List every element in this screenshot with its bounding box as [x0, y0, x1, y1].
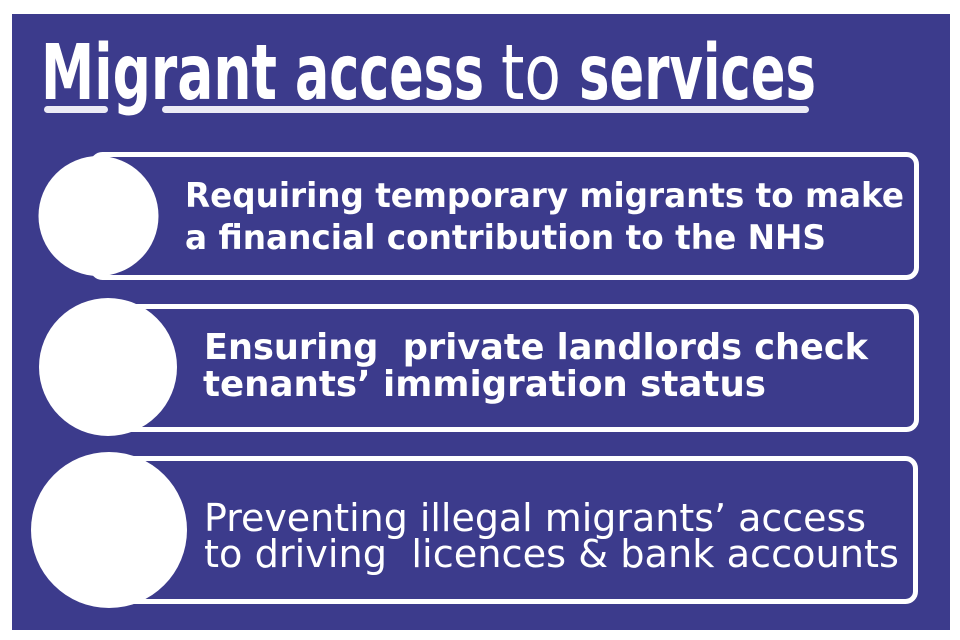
box outline [112, 458, 916, 602]
title: services [579, 29, 816, 118]
text block: Requiring temporary migrants to make [185, 176, 904, 216]
icon placeholder circle [39, 298, 177, 436]
text block [204, 496, 899, 576]
title [41, 29, 816, 118]
text block: a financial contribution to the NHS [185, 218, 826, 258]
panel: landlord checks [39, 298, 916, 436]
title: Migrant [41, 29, 277, 118]
text block: Ensuring private landlords check [204, 327, 869, 368]
text block [203, 327, 869, 405]
title: access [295, 29, 484, 118]
title underline [44, 106, 809, 113]
icon placeholder circle [38, 156, 158, 276]
title: to [501, 29, 561, 118]
icon placeholder circle [31, 452, 187, 608]
text block: tenants’ immigration status [203, 364, 766, 405]
text block: to driving licences & bank accounts [204, 532, 899, 576]
panel: NHS contribution [38, 154, 916, 278]
text block: Preventing illegal migrants’ access [204, 496, 866, 540]
panel: licences and bank accounts [31, 452, 916, 608]
text block [185, 176, 904, 258]
box outline [112, 306, 916, 430]
box outline [92, 154, 916, 278]
